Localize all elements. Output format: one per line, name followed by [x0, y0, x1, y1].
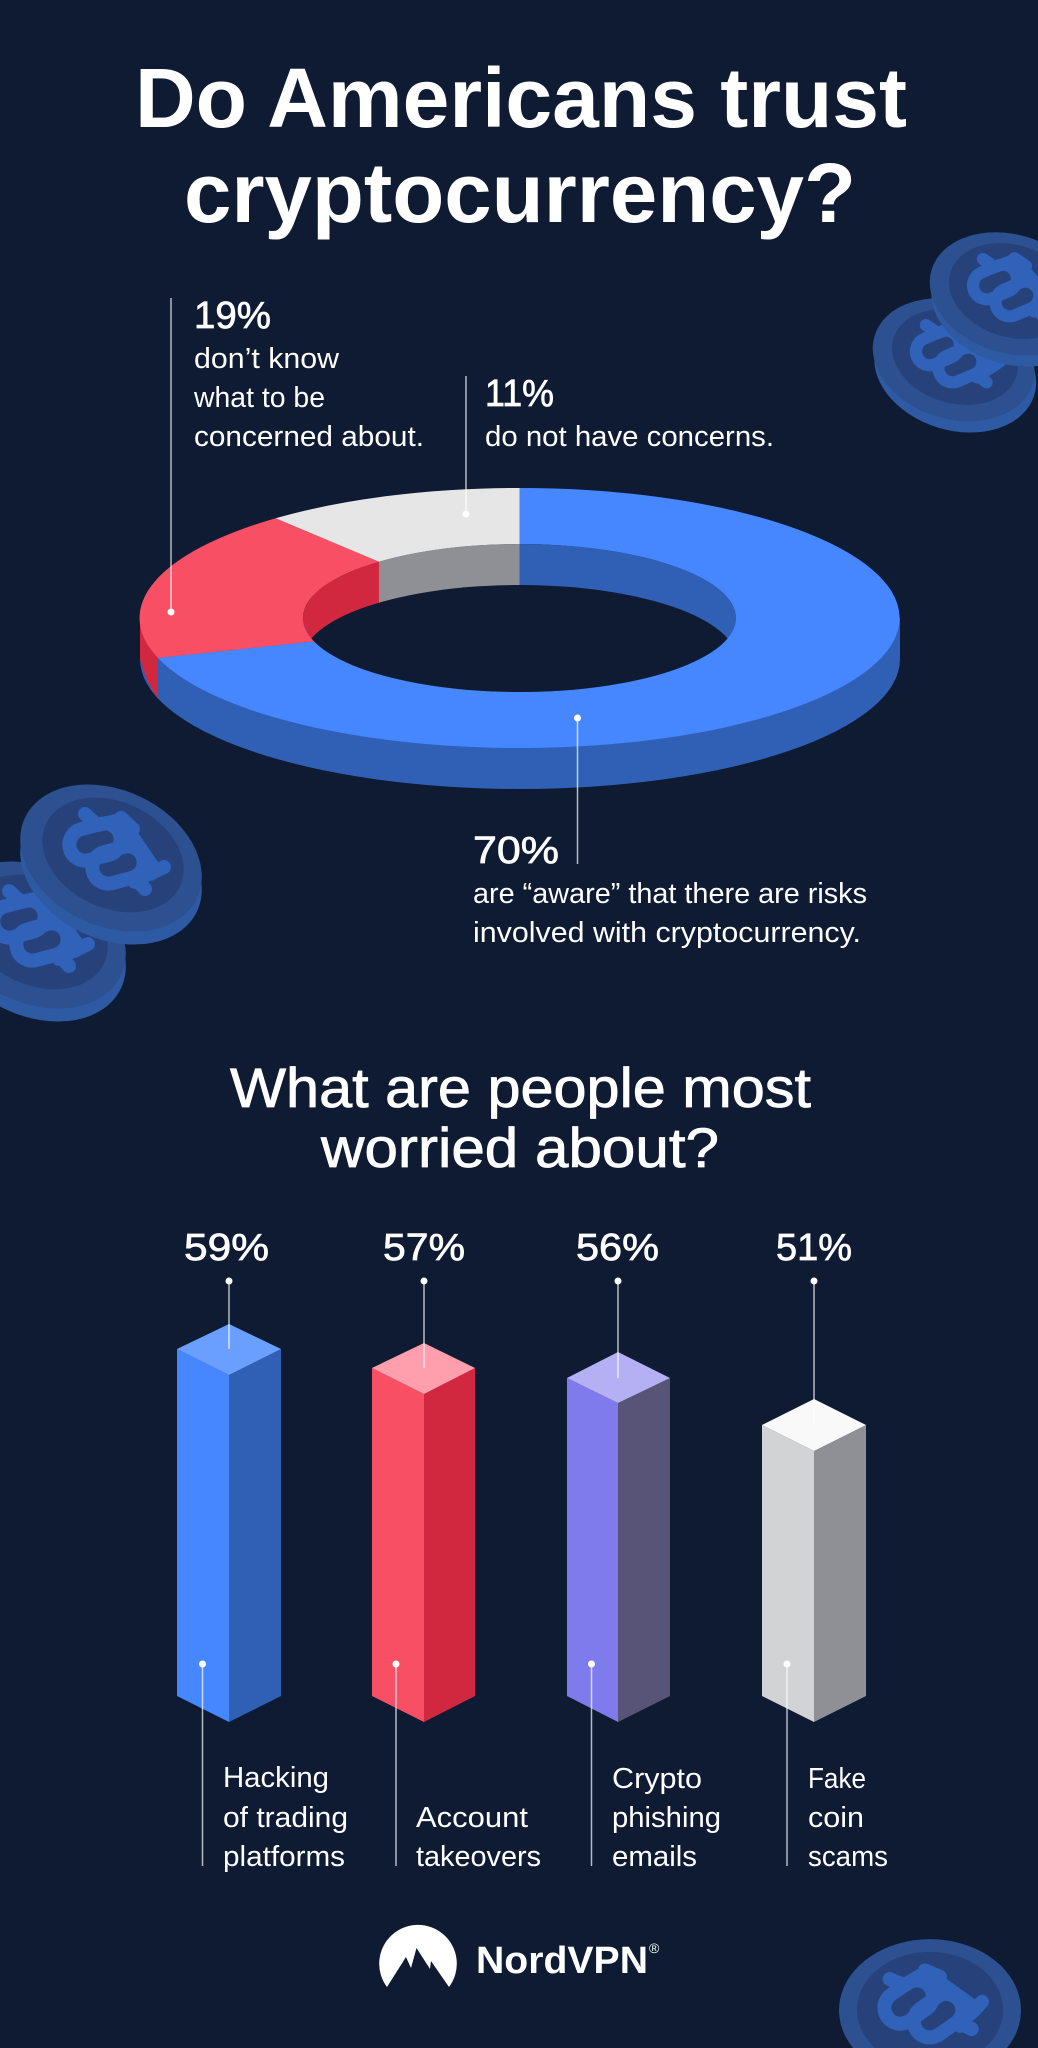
outer wall	[140, 618, 900, 789]
callout: 19%: concerned about.	[194, 421, 424, 453]
bar: hacking 59%	[177, 1227, 348, 1873]
bar: fake coin scams 51%: coin	[808, 1802, 864, 1834]
red slice 19%	[140, 518, 379, 658]
bar: crypto phishing 56%: 56%	[576, 1227, 659, 1269]
callout: 19%: what to be	[193, 382, 325, 414]
grey slice 11%	[276, 488, 520, 562]
donut chart	[140, 488, 900, 789]
bar: fake coin scams 51%	[762, 1227, 888, 1873]
outer wall red part	[140, 618, 158, 699]
icon: coins top right	[842, 192, 1038, 473]
heading: worries: worried about?	[320, 1116, 719, 1179]
leader: 19%	[168, 298, 174, 616]
title: Do Americans trust	[135, 51, 907, 145]
heading: worries	[230, 1056, 811, 1179]
inner wall and hole	[303, 544, 736, 692]
bar: hacking 59%: of trading	[223, 1802, 348, 1834]
bar: fake coin scams 51%: Fake	[808, 1763, 866, 1795]
bar: crypto phishing 56%: emails	[612, 1841, 697, 1873]
callout: 19%	[193, 295, 424, 453]
bar: crypto phishing 56%: phishing	[612, 1802, 721, 1834]
bar: crypto phishing 56%	[567, 1227, 721, 1873]
callout: 70%: 70%	[473, 830, 559, 872]
title: cryptocurrency?	[184, 146, 856, 240]
heading: worries: What are people most	[230, 1056, 811, 1119]
title	[135, 51, 907, 240]
callout: 70%	[473, 830, 867, 949]
callout: 19%: don’t know	[194, 343, 340, 375]
bar: account takeovers 57%: Account	[416, 1802, 528, 1834]
bar: account takeovers 57%: takeovers	[416, 1841, 541, 1873]
callout: 70%: are “aware” that there are risks	[473, 878, 867, 910]
icon: coin bottom right	[839, 1939, 1021, 2048]
bar: hacking 59%: platforms	[223, 1841, 345, 1873]
logo: NordVPN: ®	[649, 1940, 660, 1956]
bar: fake coin scams 51%: 51%	[776, 1227, 852, 1269]
bar: crypto phishing 56%: Crypto	[612, 1763, 702, 1795]
icon: coins left	[0, 756, 226, 1050]
bar: account takeovers 57%	[372, 1227, 541, 1873]
bar: hacking 59%: Hacking	[223, 1762, 329, 1794]
logo: NordVPN	[379, 1925, 660, 1987]
bar: hacking 59%: 59%	[184, 1227, 269, 1269]
callout: 19%: 19%	[194, 295, 271, 337]
blue slice 70%	[158, 488, 900, 748]
callout: 11%	[485, 373, 774, 453]
callout: 70%: involved with cryptocurrency.	[473, 917, 861, 949]
bar: account takeovers 57%: 57%	[383, 1227, 465, 1269]
leader: 70%	[574, 714, 581, 864]
callout: 11%: do not have concerns.	[485, 421, 774, 453]
leader: 11%	[462, 376, 470, 518]
callout: 11%: 11%	[485, 373, 554, 415]
logo: NordVPN: NordVPN	[476, 1940, 648, 1982]
bar: fake coin scams 51%: scams	[808, 1841, 888, 1873]
